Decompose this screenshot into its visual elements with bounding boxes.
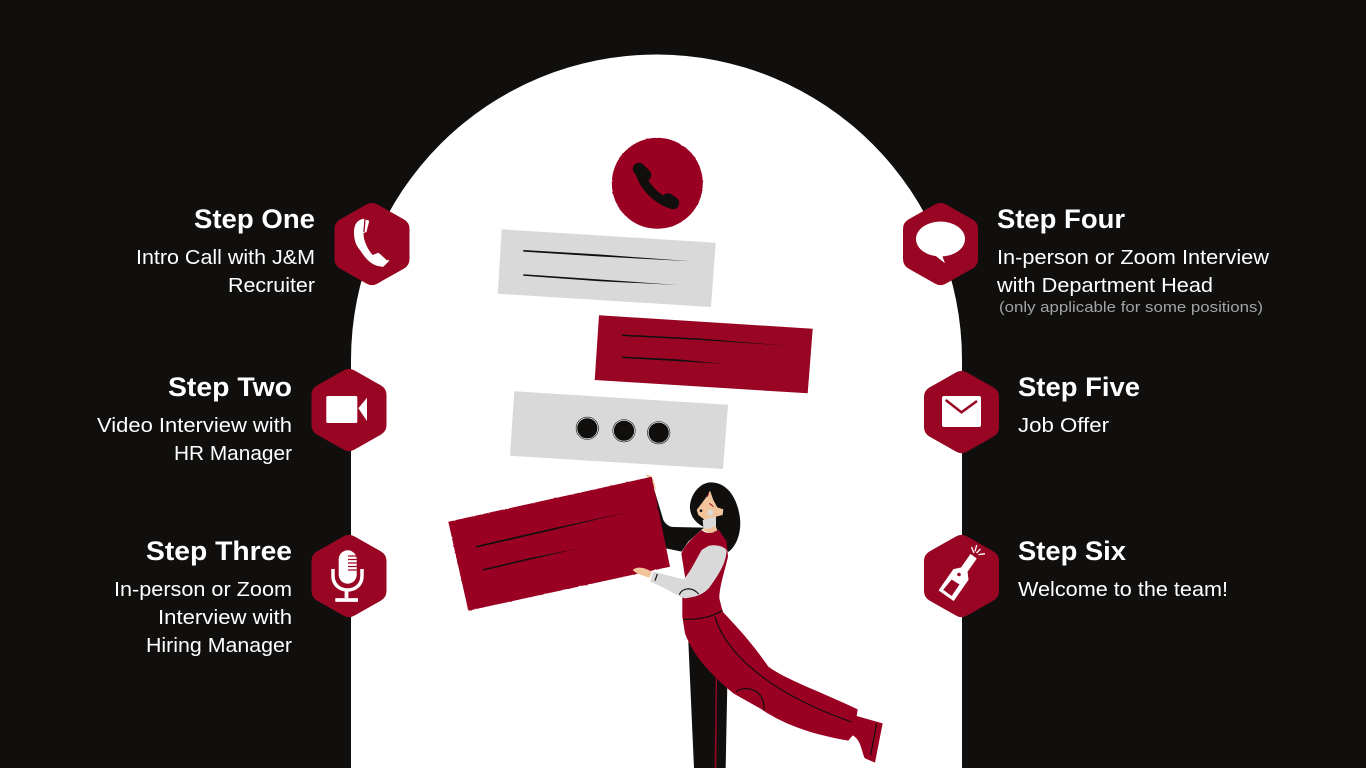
step two description <box>97 414 292 465</box>
step four heading: Step Four <box>997 204 1125 234</box>
step five description: Job Offer <box>1018 414 1109 437</box>
step three description: Interview with <box>158 606 292 629</box>
step one description: Recruiter <box>228 274 315 297</box>
step five heading: Step Five <box>1018 372 1140 402</box>
white arch <box>351 55 962 768</box>
step four note: (only applicable for some positions) <box>999 299 1263 316</box>
step two heading: Step Two <box>168 372 292 402</box>
hand <box>633 568 652 578</box>
step two description: Video Interview with <box>97 414 292 437</box>
illustration: woman <box>633 482 883 768</box>
illustration: grey message card one <box>498 229 716 307</box>
step six description: Welcome to the team! <box>1018 578 1228 601</box>
step four description: with Department Head <box>996 274 1213 297</box>
step two <box>97 372 376 465</box>
step two description: HR Manager <box>174 442 292 465</box>
face and neck <box>697 491 723 533</box>
step five icon: envelope <box>935 382 988 442</box>
step one description: Intro Call with J&M <box>136 246 315 269</box>
illustration: large red card <box>448 477 670 611</box>
step four description: In-person or Zoom Interview <box>997 246 1269 269</box>
illustration: raised arm behind the card <box>646 475 704 552</box>
step one icon: telephone <box>346 214 398 274</box>
step five <box>935 372 1140 442</box>
step one heading: Step One <box>194 204 315 234</box>
step four <box>914 204 1269 316</box>
hair <box>690 482 740 552</box>
step six heading: Step Six <box>1018 536 1126 566</box>
step six icon: champagne bottle <box>935 545 988 606</box>
step four icon: speech bubble <box>914 214 967 274</box>
step one <box>136 204 398 297</box>
standing leg <box>688 642 727 768</box>
step four description <box>996 246 1269 297</box>
step three heading: Step Three <box>146 536 292 566</box>
step three description: In-person or Zoom <box>114 578 292 601</box>
step three icon: microphone <box>322 546 376 606</box>
step two icon: video camera <box>322 380 376 440</box>
red torso and flying leg <box>681 529 883 763</box>
illustration: grey typing card <box>510 391 728 469</box>
step three description <box>114 578 292 657</box>
step one description <box>136 246 315 297</box>
step three <box>114 536 376 657</box>
garment lines <box>655 574 877 755</box>
sleeve <box>650 545 727 598</box>
step six <box>935 536 1228 606</box>
illustration: red message card <box>595 315 813 393</box>
illustration: phone circle <box>612 138 703 229</box>
step three description: Hiring Manager <box>146 634 292 657</box>
